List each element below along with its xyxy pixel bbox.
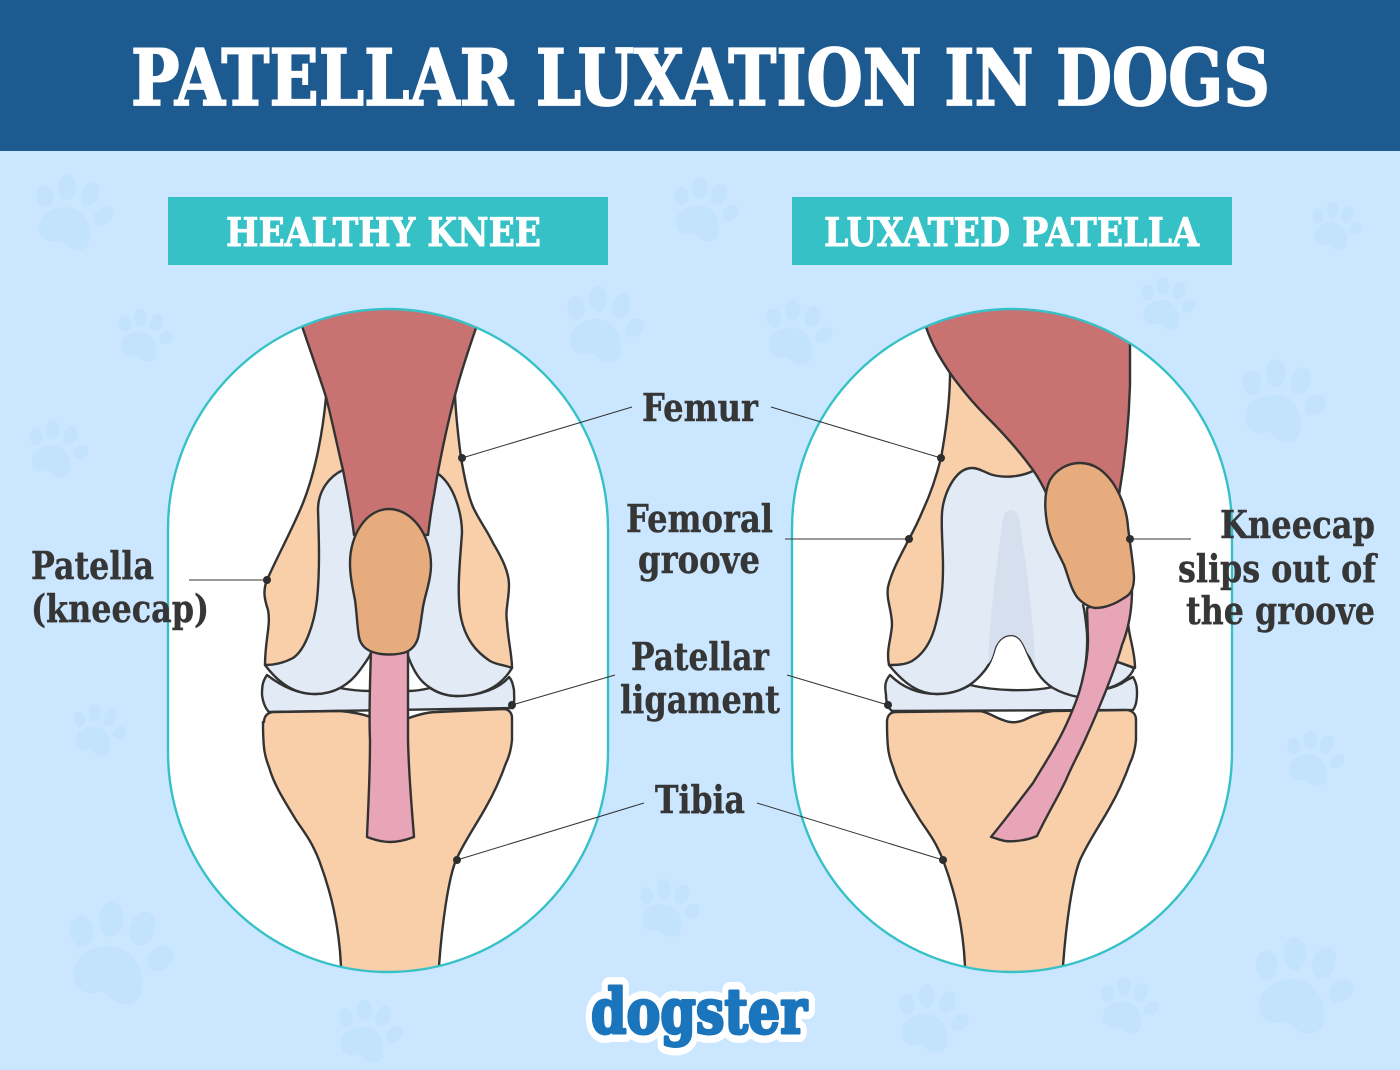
heading: luxated patella: LUXATED PATELLA <box>824 210 1200 256</box>
callout: tibia <box>453 777 947 864</box>
callout: femoral groove <box>626 496 913 582</box>
logo: dogster: dogster <box>591 975 808 1048</box>
callout: patellar ligament <box>508 634 892 722</box>
callout: patella (kneecap): (kneecap) <box>31 586 209 631</box>
panel: luxated patella diagram <box>792 300 1232 985</box>
femur <box>888 373 1040 665</box>
callout: kneecap slips out of the groove: Kneecap <box>1220 502 1375 547</box>
quadriceps muscle <box>925 310 1132 494</box>
callout: femur: Femur <box>642 385 759 430</box>
heading: healthy knee: HEALTHY KNEE <box>226 210 541 256</box>
callout: patella (kneecap) <box>31 543 271 631</box>
displaced patella <box>1045 463 1134 608</box>
logo: dogster: dogster <box>591 975 808 1048</box>
patellar ligament <box>367 650 414 842</box>
heading: luxated patella <box>792 197 1232 265</box>
callout: femur <box>458 385 945 462</box>
callout: patellar ligament: ligament <box>620 677 780 722</box>
callout: patella (kneecap): Patella <box>31 543 154 588</box>
quadriceps muscle <box>296 300 482 535</box>
patella <box>350 509 431 654</box>
displaced patellar ligament <box>991 590 1132 841</box>
callout: kneecap slips out of the groove <box>1126 502 1378 633</box>
callout: femoral groove: Femoral <box>626 496 773 541</box>
meniscus <box>262 675 514 712</box>
femoral groove cartilage <box>265 470 512 696</box>
meniscus <box>885 675 1137 711</box>
femur right condyle <box>430 395 512 668</box>
callout: femoral groove: groove <box>638 537 760 582</box>
femur left condyle <box>264 397 350 665</box>
header band <box>0 0 1400 151</box>
heading: healthy knee <box>168 197 608 265</box>
femoral groove shading <box>988 510 1035 664</box>
panel: healthy knee diagram <box>168 300 608 985</box>
callout: patellar ligament: Patellar <box>631 634 770 679</box>
callout: tibia: Tibia <box>655 777 745 822</box>
tibia <box>263 709 512 985</box>
femoral cartilage <box>889 468 1087 697</box>
femur and cartilage right sliver <box>1108 625 1136 690</box>
background paw prints <box>29 174 1365 1063</box>
tibia <box>887 710 1136 985</box>
